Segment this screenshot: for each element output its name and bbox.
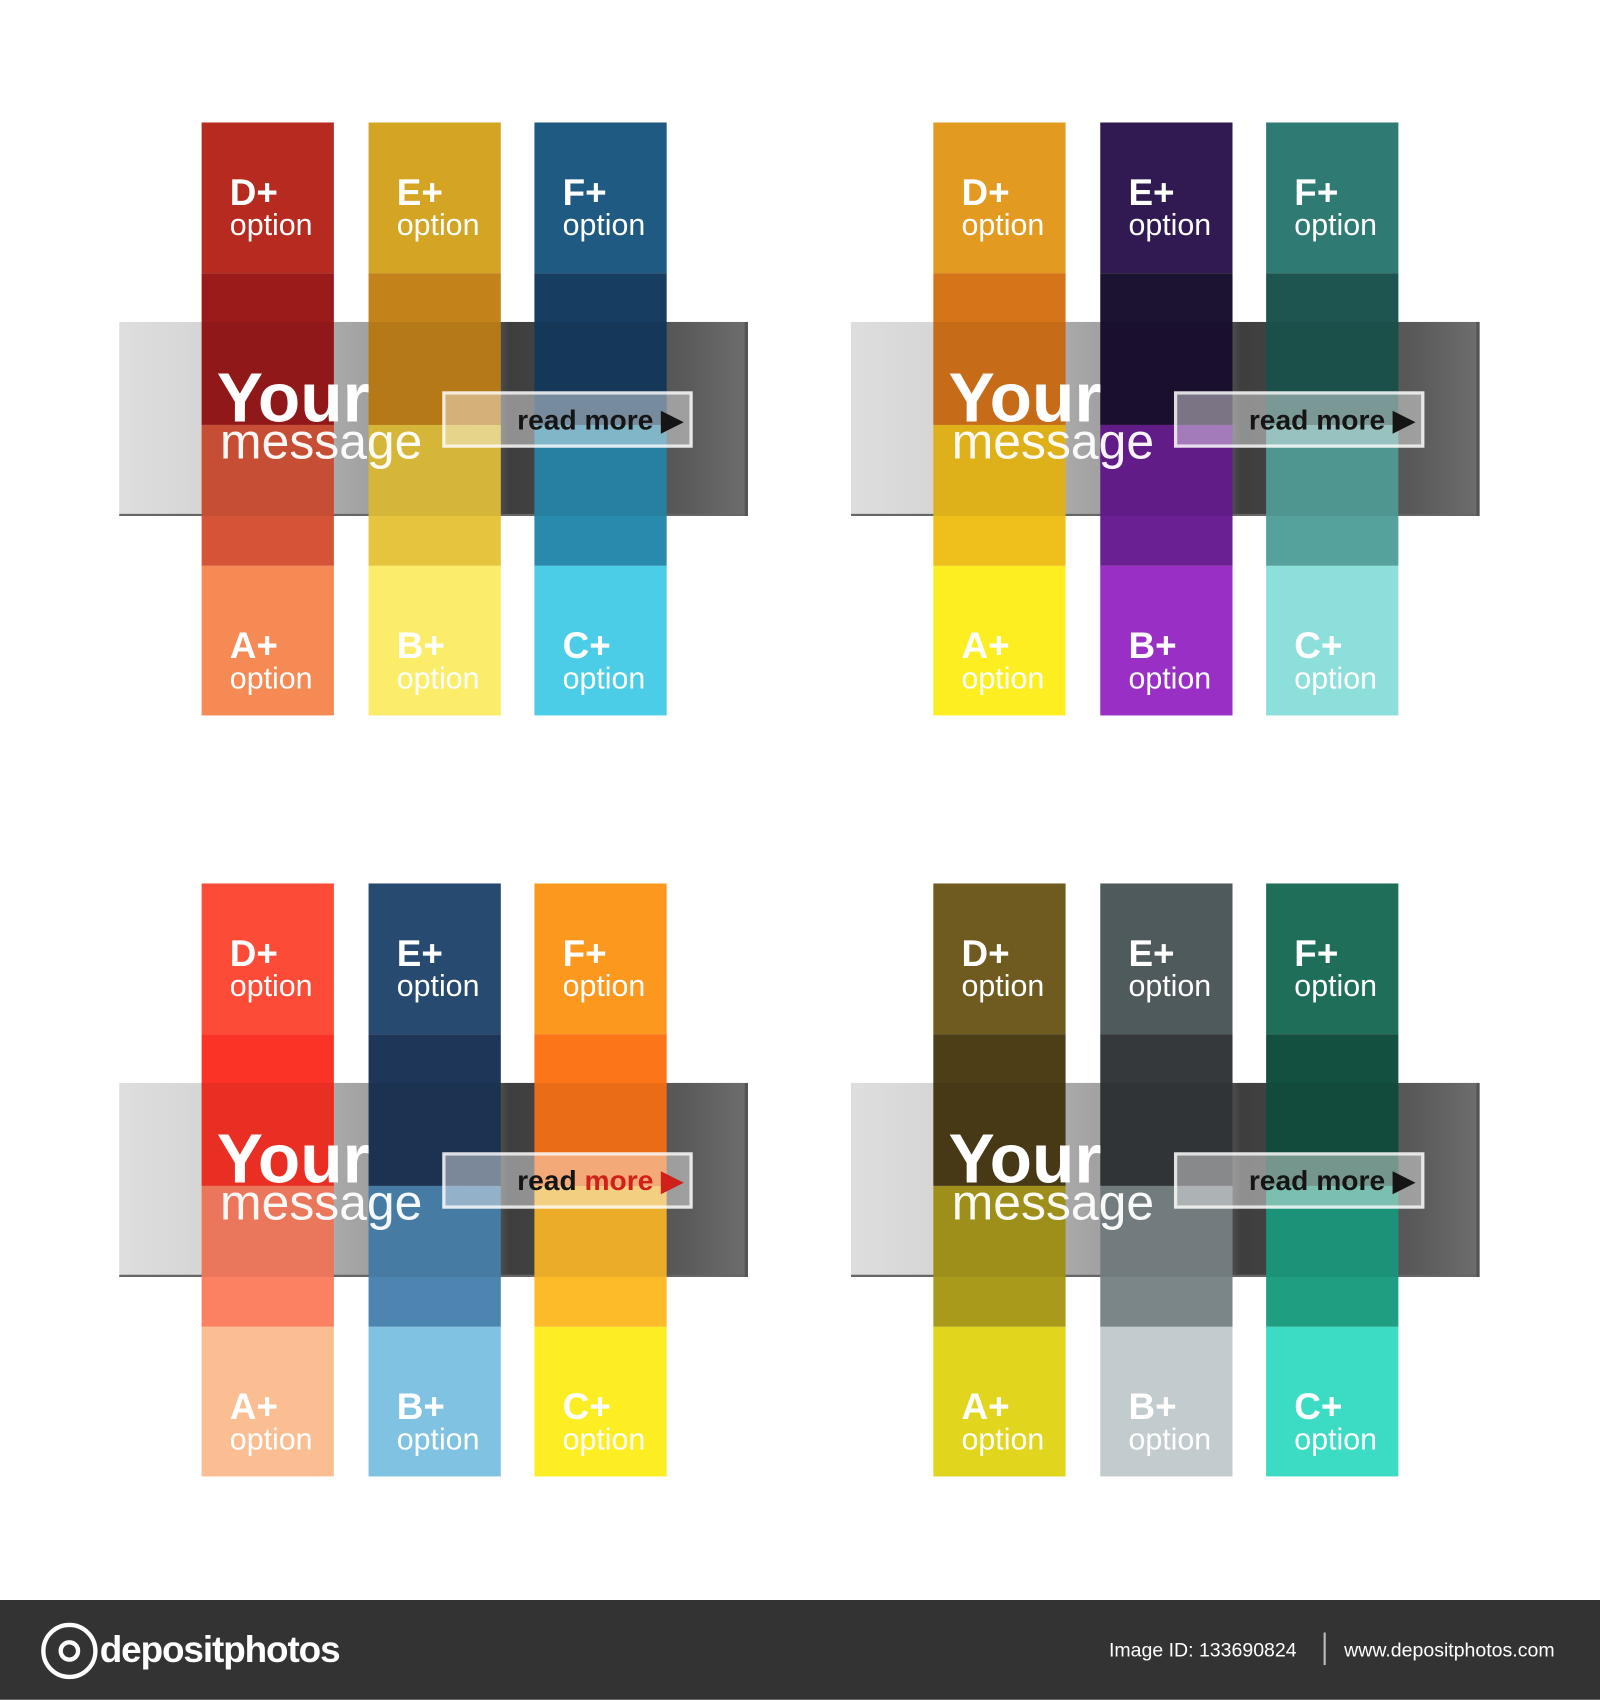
column: F/C orange: F+	[563, 933, 607, 975]
footer bar	[0, 1600, 1600, 1700]
column: F/C green	[1266, 883, 1398, 1476]
column: E/B purple	[1100, 122, 1233, 716]
column: D/A olive: option	[962, 969, 1044, 1003]
column: E/B gray	[1100, 883, 1232, 1476]
column: E/B purple: E+	[1128, 172, 1175, 214]
column: F/C blue: option	[563, 661, 645, 695]
column: D/A red: A+	[230, 625, 278, 667]
column: F/C green: option	[1294, 969, 1377, 1003]
column: D/A olive	[933, 883, 1066, 1476]
column: E/B purple: B+	[1128, 625, 1177, 667]
panel: quadrant top-left	[119, 122, 748, 716]
column: D/A olive: option	[962, 1422, 1044, 1456]
panel: quadrant top-right	[851, 122, 1480, 716]
column: D/A red: option	[230, 661, 313, 695]
column: D/A olive: D+	[962, 933, 1010, 975]
column: E/B gray: option	[1128, 969, 1211, 1003]
button: read more: read more ▶	[1249, 1164, 1415, 1197]
column: D/A orange: D+	[962, 172, 1010, 214]
column: D/A red	[202, 122, 334, 716]
grey band	[851, 1083, 1480, 1277]
column: E/B purple: option	[1128, 208, 1211, 242]
column: E/B yellow: option	[397, 208, 479, 242]
button: read more: read more ▶	[517, 403, 683, 436]
column: F/C green: F+	[1294, 933, 1338, 975]
heading: Your: Your	[217, 1120, 370, 1198]
heading: Your: Your	[949, 1120, 1101, 1198]
column: F/C teal: option	[1294, 208, 1377, 242]
column: D/A orange	[933, 122, 1066, 716]
column: D/A orange: A+	[962, 625, 1010, 667]
grey band	[119, 1083, 748, 1277]
column: F/C teal: option	[1294, 661, 1377, 695]
column: F/C teal: F+	[1294, 172, 1338, 214]
column: E/B navy: option	[397, 969, 479, 1003]
heading: message: message	[952, 413, 1154, 469]
column: F/C blue	[534, 122, 667, 716]
button: read more: read more ▶	[1249, 403, 1415, 436]
website text: www.depositphotos.com	[1344, 1639, 1555, 1661]
icon: camera logo	[41, 1623, 98, 1679]
logo text: depositphotos	[100, 1629, 340, 1670]
column: D/A red: option	[230, 208, 313, 242]
column: F/C teal: C+	[1294, 625, 1342, 667]
heading: message: message	[952, 1174, 1154, 1230]
column: F/C teal	[1266, 122, 1398, 716]
column: E/B navy	[368, 883, 501, 1476]
image id text: Image ID: 133690824	[1109, 1639, 1297, 1661]
column: F/C blue: option	[563, 208, 645, 242]
column: D/A red-orange: D+	[230, 933, 278, 975]
column: E/B gray: B+	[1128, 1386, 1177, 1428]
column: E/B yellow: B+	[397, 625, 445, 667]
heading: Your: Your	[949, 359, 1101, 437]
column: E/B purple: option	[1128, 661, 1211, 695]
column: F/C orange	[534, 883, 667, 1476]
column: E/B yellow: option	[397, 661, 479, 695]
column: E/B gray: E+	[1128, 933, 1175, 975]
column: F/C orange: option	[563, 1422, 645, 1456]
column: D/A red-orange	[202, 883, 334, 1476]
column: D/A red-orange: option	[230, 969, 313, 1003]
column: E/B gray: option	[1128, 1422, 1211, 1456]
column: F/C blue: F+	[563, 172, 607, 214]
heading: message: message	[220, 413, 422, 469]
column: F/C orange: option	[563, 969, 645, 1003]
column: F/C blue: C+	[563, 625, 611, 667]
grey band	[119, 322, 748, 516]
column: D/A red-orange: A+	[230, 1386, 278, 1428]
column: E/B yellow	[368, 122, 501, 716]
column: D/A olive: A+	[962, 1386, 1010, 1428]
button: read more	[442, 391, 693, 448]
button: read more	[442, 1152, 693, 1209]
column: D/A red-orange: option	[230, 1422, 313, 1456]
button: read more: read more ▶	[517, 1164, 683, 1197]
column: E/B navy: E+	[397, 933, 443, 975]
button: read more	[1174, 1152, 1424, 1209]
column: D/A orange: option	[962, 661, 1044, 695]
panel: quadrant bottom-right	[851, 883, 1480, 1476]
column: F/C orange: C+	[563, 1386, 611, 1428]
column: F/C green: C+	[1294, 1386, 1342, 1428]
panel: quadrant bottom-left	[119, 883, 748, 1476]
heading: Your: Your	[217, 359, 370, 437]
heading: message: message	[220, 1174, 422, 1230]
column: E/B navy: option	[397, 1422, 479, 1456]
column: E/B navy: B+	[397, 1386, 445, 1428]
column: E/B yellow: E+	[397, 172, 443, 214]
column: D/A orange: option	[962, 208, 1044, 242]
column: F/C green: option	[1294, 1422, 1377, 1456]
column: D/A red: D+	[230, 172, 278, 214]
button: read more	[1174, 391, 1424, 448]
grey band	[851, 322, 1480, 516]
